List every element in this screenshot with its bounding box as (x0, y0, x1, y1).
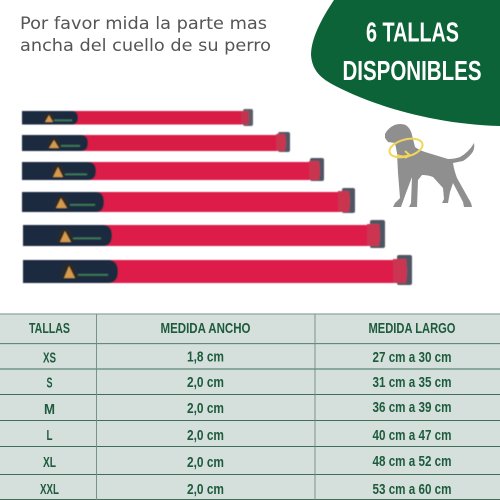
icon: dog with collar ring (385, 124, 474, 207)
heading text: 6 TALLAS (366, 16, 459, 48)
table header (29, 320, 456, 337)
row M: 36 cm a 39 cm (372, 399, 452, 416)
intro text (20, 14, 271, 56)
row S: 2,0 cm (187, 374, 224, 391)
strap L (22, 188, 355, 213)
table header: MEDIDA ANCHO (160, 320, 251, 337)
row S: 31 cm a 35 cm (372, 374, 452, 391)
row XXL: XXL (40, 481, 59, 498)
row XXL: 2,0 cm (187, 481, 224, 498)
strap XL (23, 220, 385, 248)
icon: collar arrow (387, 135, 425, 161)
size table (0, 314, 500, 500)
strap XXL (23, 255, 412, 285)
row XS: 1,8 cm (187, 348, 224, 366)
row XL: XL (43, 454, 56, 471)
intro text: Por favor mida la parte mas (20, 14, 267, 34)
row XS: XS (43, 350, 56, 366)
straps (22, 109, 412, 285)
row L: 40 cm a 47 cm (372, 427, 452, 444)
strap S (22, 132, 290, 152)
table header: MEDIDA LARGO (368, 320, 456, 337)
row XS: 27 cm a 30 cm (372, 349, 452, 366)
table grid (0, 314, 500, 500)
row XL: 48 cm a 52 cm (372, 453, 452, 470)
strap M (22, 158, 324, 181)
row M: M (44, 401, 55, 418)
row L: 2,0 cm (187, 427, 224, 444)
heading text (342, 16, 482, 86)
row M (44, 399, 452, 418)
row XXL: 53 cm a 60 cm (372, 481, 452, 498)
row L (46, 427, 452, 444)
table header: TALLAS (29, 320, 70, 337)
strap XS (22, 109, 253, 126)
row XL (43, 453, 452, 471)
row M: 2,0 cm (187, 400, 224, 417)
row S (46, 374, 452, 392)
intro text: ancha del cuello de su perro (20, 36, 271, 56)
row XXL (40, 481, 452, 498)
row XL: 2,0 cm (187, 454, 224, 471)
green heading banner (311, 0, 500, 126)
row XS (43, 348, 452, 366)
row L: L (46, 427, 52, 444)
row S: S (46, 374, 52, 392)
